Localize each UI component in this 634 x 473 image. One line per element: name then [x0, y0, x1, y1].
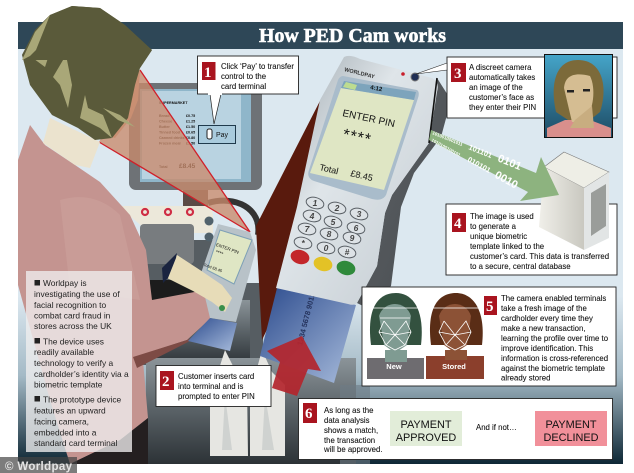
callout 3: they enter their PIN: [469, 103, 536, 112]
till monitor: [129, 83, 262, 190]
green data arrow: 101101: [467, 143, 493, 160]
main card terminal: 4: [309, 211, 315, 221]
callout 1: 1: [204, 65, 212, 81]
text panel: key facts: standard card terminal: [34, 438, 117, 448]
face: stored: Stored: [442, 362, 466, 371]
main card terminal: 4:12: [370, 85, 383, 93]
callout 3: customer’s face as: [469, 93, 534, 102]
main card terminal: £8.45: [350, 168, 374, 183]
small terminal and hand: Total £8.45: [203, 262, 224, 274]
callout 4: to a secure, central database: [470, 262, 571, 271]
green data arrow: 0101: [496, 153, 523, 173]
main card terminal: 1234 5678 9012: [295, 292, 317, 346]
main card terminal: WORLDPAY: [344, 67, 376, 81]
callout 6: 6: [305, 406, 313, 422]
main card terminal: 1: [313, 198, 318, 208]
callout 5: The camera enabled terminals: [501, 294, 606, 303]
receipt text: Total: [159, 165, 168, 169]
receipt text: Frozen meal: [159, 142, 181, 146]
text panel: key facts: stores across the UK: [34, 321, 112, 331]
lcd: [310, 88, 414, 190]
customer portrait: [544, 54, 612, 138]
hand: [165, 255, 232, 312]
receipt text: £0.65: [186, 130, 195, 134]
callout 5: information is cross-referenced: [501, 354, 608, 363]
text panel: key facts: facial recognition to: [34, 300, 107, 310]
callout 4: 4: [454, 216, 462, 232]
callout 5: learning the profile over time to: [501, 334, 609, 343]
main card terminal: 6: [354, 223, 359, 233]
collar: [43, 118, 100, 168]
main card terminal: #: [345, 247, 350, 257]
callout 5: improve identification. This: [501, 344, 593, 353]
scene: checkout counter: [118, 190, 370, 464]
callout 2: prompted to enter PIN: [178, 392, 255, 401]
payment declined: PAYMENT: [545, 419, 597, 431]
main card terminal: 9: [350, 233, 355, 243]
callout 5: cardholder every time they: [501, 314, 593, 323]
text panel: key facts: combat card fraud in: [34, 310, 111, 320]
text panel: key facts: features an upward: [34, 406, 106, 416]
text panel: key facts: facing camera,: [34, 416, 89, 426]
red arrow: card insertion: [267, 336, 321, 396]
receipt text: Tinned food: [159, 130, 181, 134]
green data arrow: 0010: [493, 169, 520, 191]
photo credit: [0, 457, 77, 473]
small terminal and hand: [162, 224, 256, 351]
green data arrow: 1010010001011: [432, 130, 464, 147]
pay button: Pay: [216, 132, 229, 139]
monitor stand: [183, 190, 208, 208]
callout 1: [198, 56, 298, 124]
view cone: camera to face: [99, 70, 250, 232]
face: new: [367, 293, 424, 379]
callout 5: make a new transaction,: [501, 324, 586, 333]
keypad: [293, 195, 369, 260]
receipt text: £1.25: [186, 120, 195, 124]
callout 3: an image of the: [469, 83, 523, 92]
callout 6: [298, 398, 612, 460]
coat and arm: [18, 125, 213, 464]
callout 1: card terminal: [221, 82, 266, 91]
callout 2: [156, 366, 271, 406]
receipt text: £1.50: [186, 125, 195, 129]
receipt text: [159, 101, 196, 170]
card: [260, 288, 356, 383]
text panel: key facts: embedded into a: [34, 428, 97, 438]
text panel: key facts: investigating the use of: [34, 289, 120, 299]
face: stored: [426, 293, 484, 379]
text panel: key facts: [26, 271, 132, 452]
callout 3: 3: [454, 66, 462, 82]
callout 3: [416, 57, 617, 118]
callout 2: into terminal and is: [178, 382, 244, 391]
callout 5: [362, 287, 616, 386]
bezel: [308, 76, 419, 200]
grip: [357, 78, 451, 308]
text panel: key facts: technology to verify a: [34, 358, 113, 368]
cable: [208, 201, 258, 235]
receipt text: £0.75: [186, 114, 195, 118]
receipt text: SUPERMARKET: [159, 101, 188, 105]
payment approved: PAYMENT: [400, 419, 452, 431]
callout 5: 5: [486, 299, 494, 315]
text panel: key facts: cardholder’s identity via a: [34, 369, 129, 379]
face: new: New: [386, 362, 402, 371]
payment declined: DECLINED: [543, 432, 599, 444]
callout 6: And if not…: [476, 423, 517, 432]
callout 6: As long as the: [324, 406, 373, 415]
green data arrow: 010101: [466, 155, 492, 175]
customer hair over title bar: [22, 6, 152, 68]
receipt text: Butter: [159, 125, 170, 129]
main card terminal: *: [301, 238, 305, 248]
small terminal and hand: ****: [214, 249, 224, 258]
main card terminal: [260, 56, 451, 383]
receipt text: Cheese: [159, 120, 172, 124]
main card terminal: 8: [327, 229, 332, 239]
database server: [539, 152, 609, 250]
callout 5: take a fresh image of the: [501, 304, 587, 313]
receipt text: Bread: [159, 114, 170, 118]
payment approved: [390, 411, 462, 446]
callout 4: customer’s card. This data is transferred: [470, 252, 609, 261]
main card terminal: 7: [305, 224, 311, 234]
callout 6: data analysis: [324, 416, 370, 425]
callout 5: already stored: [501, 374, 550, 382]
callout 4: [446, 204, 617, 275]
red cone to main terminal: [256, 97, 322, 340]
text panel: key facts: biometric template: [34, 380, 103, 390]
main card terminal: 5: [331, 217, 336, 227]
callout 5: against the biometric template: [501, 364, 605, 373]
till base: [118, 206, 213, 233]
main card terminal: ****: [341, 126, 373, 149]
camera: [411, 73, 419, 81]
main card terminal: ENTER PIN: [341, 108, 396, 130]
text panel: key facts: The device uses: [43, 336, 104, 346]
body: [276, 56, 438, 305]
callout 4: unique biometric: [470, 232, 527, 241]
face: [95, 70, 140, 138]
callout 6: will be approved.: [323, 445, 383, 454]
hair: [22, 6, 152, 140]
photo credit: © Worldpay: [5, 461, 73, 473]
payment approved: APPROVED: [396, 432, 456, 444]
text panel: key facts: readily available: [34, 347, 94, 357]
payment declined: [535, 411, 607, 446]
callout 1: Click ‘Pay’ to transfer: [221, 62, 294, 71]
title bar: How PED Cam works: [259, 25, 446, 47]
text panel: key facts: The prototype device: [43, 394, 122, 404]
main card terminal: Total: [319, 162, 339, 176]
text panel: key facts: Worldpay is: [43, 278, 87, 288]
receipt text: £1.50: [186, 142, 195, 146]
main card terminal: 2: [334, 203, 340, 213]
receipt text: Canned drinks: [159, 136, 185, 140]
callout 4: The image is used: [470, 212, 534, 221]
callout 6: shows a match,: [324, 426, 378, 435]
receipt text: £0.80: [186, 136, 195, 140]
green data arrow: [429, 130, 559, 201]
callout 2: 2: [162, 374, 170, 390]
shopping bags: [210, 350, 285, 456]
callout 6: the transaction: [324, 436, 375, 445]
main card terminal: 3: [357, 209, 362, 219]
small terminal and hand: ENTER PIN: [215, 242, 240, 255]
callout 1: control to the: [221, 72, 266, 81]
callout 4: template linked to the: [470, 242, 544, 251]
callout 3: A discreet camera: [469, 63, 532, 72]
receipt text: £8.45: [179, 163, 196, 170]
till indicator rings: [142, 209, 193, 215]
title bar: [18, 22, 623, 49]
green data arrow: 1010100100101: [431, 138, 462, 158]
customer head: [22, 6, 152, 168]
main card terminal: 0: [324, 243, 329, 253]
callout 4: to generate a: [470, 222, 517, 231]
callout 2: Customer inserts card: [178, 372, 254, 381]
callout 3: automatically takes: [469, 73, 535, 82]
